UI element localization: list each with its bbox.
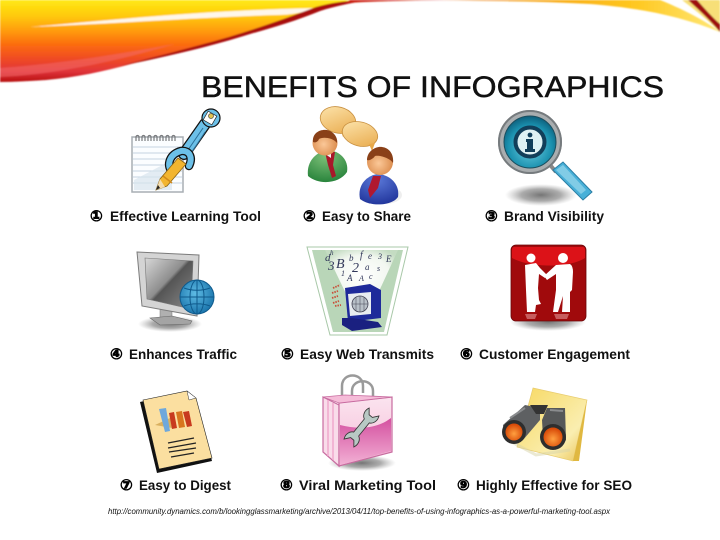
label: effective learning tool: ① xyxy=(90,207,103,225)
icon: document with bar chart xyxy=(140,391,212,473)
label: customer engagement: ⑥ xyxy=(460,345,473,363)
label: easy to share: Easy to Share xyxy=(322,208,411,224)
icon: web transmit monitor: b xyxy=(349,253,354,263)
icon: web transmit monitor xyxy=(307,247,408,335)
icon: web transmit monitor: A xyxy=(346,273,353,283)
label: brand visibility: Brand Visibility xyxy=(504,208,604,224)
icon: two people with speech bubbles xyxy=(308,103,402,204)
label: highly effective for seo: ⑨ xyxy=(457,476,470,494)
icon: web transmit monitor: h xyxy=(330,249,334,257)
label: enhances traffic: Enhances Traffic xyxy=(129,346,237,362)
label: easy to digest: ⑦ xyxy=(120,476,133,494)
label: brand visibility: ③ xyxy=(485,207,498,225)
source url: http://community.dynamics.com/b/lookingglassmarketing/archive/2013/04/11/top-benefits-of-using-infographics-as-a-powerful-marketing-tool.aspx xyxy=(108,507,611,516)
icon: web transmit monitor: E xyxy=(385,254,392,264)
label: viral marketing tool: Viral Marketing Tool xyxy=(299,477,436,493)
icon: web transmit monitor: c xyxy=(369,272,373,281)
label: easy to digest: Easy to Digest xyxy=(139,477,231,493)
icon: notepad with wrench and pencil xyxy=(132,109,220,192)
icon: web transmit monitor: e xyxy=(368,251,372,261)
icon: web transmit monitor: 3 xyxy=(377,252,382,261)
label: enhances traffic: ④ xyxy=(110,345,123,363)
icon: web transmit monitor: 1 xyxy=(341,269,345,278)
label: customer engagement: Customer Engagement xyxy=(479,346,630,362)
icon: handshake red square xyxy=(510,245,586,331)
label: effective learning tool: Effective Learning Tool xyxy=(110,208,261,224)
label: easy to share: ② xyxy=(303,207,316,225)
icon: binoculars on folder xyxy=(502,388,587,461)
label: highly effective for seo: Highly Effective for SEO xyxy=(476,477,632,493)
icon: web transmit monitor: d xyxy=(325,252,331,264)
label: viral marketing tool: ⑧ xyxy=(280,476,293,494)
icon: web transmit monitor: 2 xyxy=(352,261,359,276)
decorative banner swoosh xyxy=(0,0,720,82)
icon: web transmit monitor: a xyxy=(365,262,370,272)
icon: web transmit monitor: 3 xyxy=(327,258,335,273)
icon: web transmit monitor: f xyxy=(360,250,364,261)
label: easy web transmits: ⑤ xyxy=(281,345,294,363)
icon: pink shopping bag xyxy=(323,376,396,471)
title: BENEFITS OF INFOGRAPHICS xyxy=(201,71,664,104)
icon: web transmit monitor: B xyxy=(336,257,345,272)
label: easy web transmits: Easy Web Transmits xyxy=(300,346,434,362)
icon: web transmit monitor: s xyxy=(377,264,380,273)
icon: monitor with globe xyxy=(137,252,214,332)
icon: web transmit monitor: A xyxy=(358,274,364,283)
icon: magnifying glass xyxy=(498,110,592,206)
